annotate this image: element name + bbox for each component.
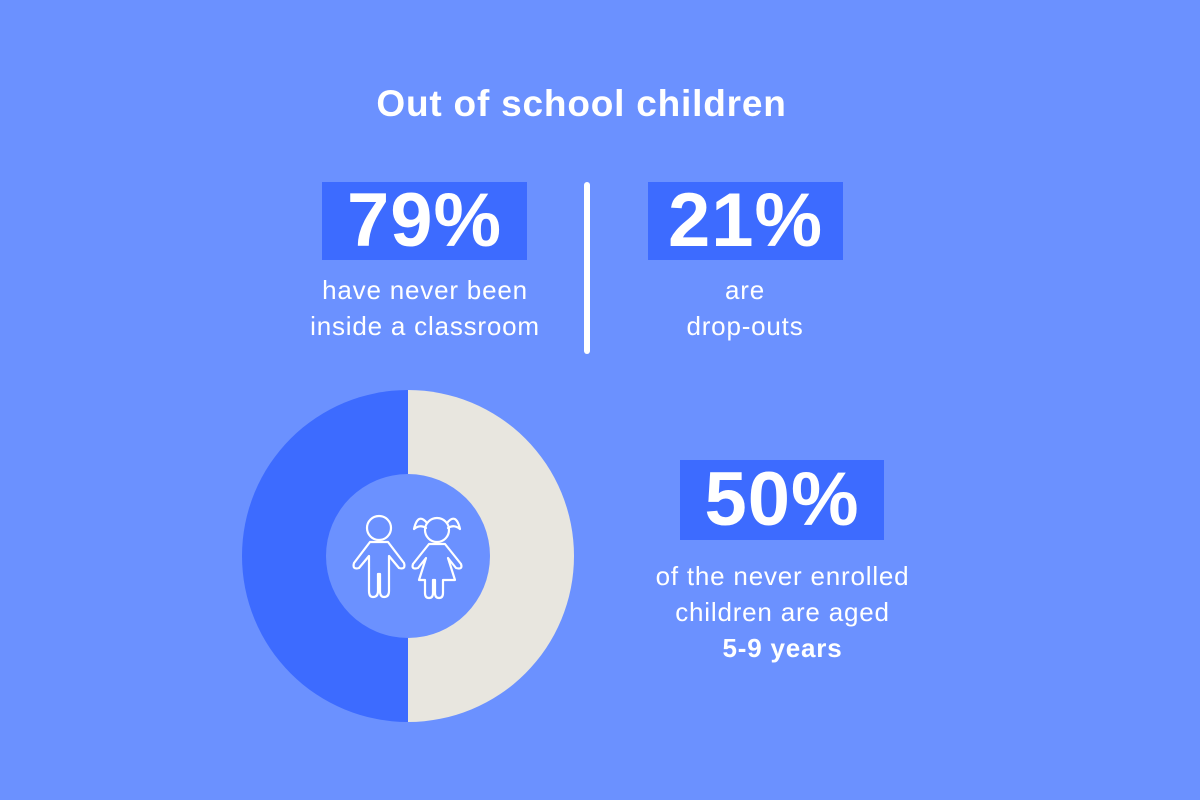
caption 79%: inside a classroom [310, 311, 540, 341]
caption 21%: are [725, 275, 765, 305]
caption 50%: 5-9 years [723, 633, 842, 663]
caption 79% [310, 275, 540, 341]
caption 50% [656, 561, 909, 663]
caption 21% [686, 275, 804, 341]
title: Out of school children [376, 83, 787, 124]
stat: 50% [656, 457, 909, 663]
highlight box 79%: 79% [347, 178, 502, 263]
stat: 79% [310, 178, 540, 341]
caption 79%: have never been [322, 275, 528, 305]
stat: 21% [648, 178, 843, 341]
caption 50%: of the never enrolled [656, 561, 909, 591]
divider [584, 182, 590, 354]
caption 21%: drop-outs [686, 311, 804, 341]
caption 50%: children are aged [675, 597, 890, 627]
highlight box 50%: 50% [704, 457, 860, 542]
icon: children [354, 516, 461, 598]
highlight box 21%: 21% [668, 178, 823, 263]
